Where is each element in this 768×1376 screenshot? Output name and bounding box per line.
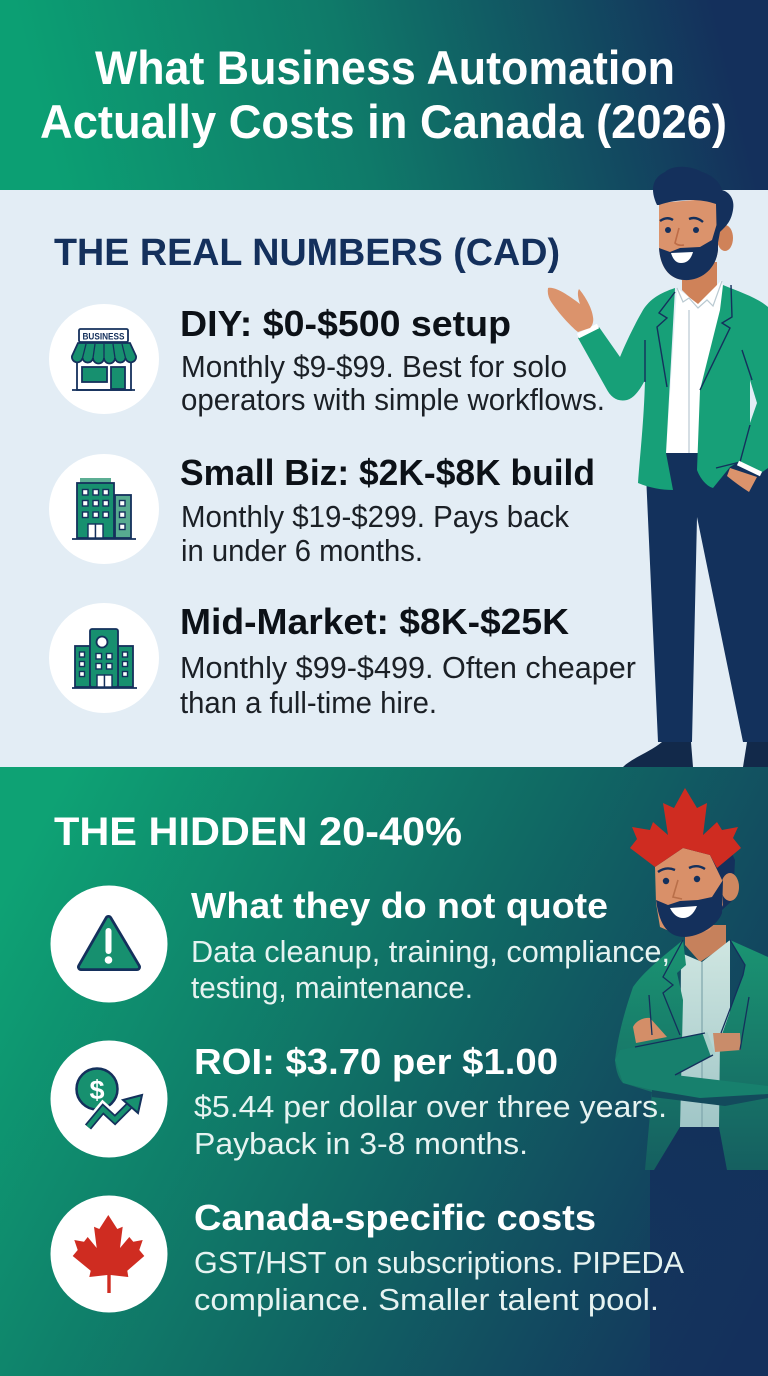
item: mid-market: Monthly $99-$499. Often cheaper <box>180 651 636 685</box>
item: Canada-specific costs <box>50 1196 684 1317</box>
item: what they do not quote <box>50 885 670 1005</box>
item: small business: Monthly $19-$299. Pays back <box>181 500 570 534</box>
item: DIY: DIY: $0-$500 setup <box>180 303 511 344</box>
item: mid-market <box>49 601 636 720</box>
icon: mid-size building <box>72 629 137 688</box>
item: what they do not quote: testing, maintenance. <box>191 970 473 1005</box>
icon: dollar coin with rising arrow <box>76 1068 142 1127</box>
title: Actually Costs in Canada (2026) <box>40 95 727 148</box>
icon: storefront: BUSINESS <box>82 332 124 342</box>
item: ROI: Payback in 3-8 months. <box>194 1126 528 1161</box>
item: small business: Small Biz: $2K-$8K build <box>180 452 595 493</box>
item: mid-market: than a full-time hire. <box>180 686 437 720</box>
item: small business <box>49 452 595 568</box>
icon: storefront <box>72 329 136 390</box>
item: small business: in under 6 months. <box>181 534 423 568</box>
title: What Business Automation <box>95 41 675 94</box>
heading: the real numbers: THE REAL NUMBERS (CAD) <box>54 232 560 274</box>
item: what they do not quote: What they do not quote <box>191 885 608 926</box>
illustration: presenter in green blazer <box>548 167 768 767</box>
item: what they do not quote: Data cleanup, training, compliance, <box>191 934 670 969</box>
item: ROI: $5.44 per dollar over three years. <box>194 1089 667 1124</box>
panel: the real numbers <box>0 190 768 767</box>
icon: maple leaf <box>73 1215 144 1293</box>
item: mid-market: Mid-Market: $8K-$25K <box>180 601 569 642</box>
icon: warning triangle <box>81 919 137 967</box>
item: Canada-specific costs: Canada-specific costs <box>194 1197 596 1238</box>
item: DIY <box>49 303 605 417</box>
heading: the hidden 20-40%: THE HIDDEN 20-40% <box>54 810 462 854</box>
icon: dollar coin with rising arrow: $ <box>89 1075 105 1105</box>
header band <box>0 0 768 190</box>
item: Canada-specific costs: compliance. Smaller talent pool. <box>194 1282 659 1317</box>
item: ROI <box>50 1040 667 1161</box>
item: Canada-specific costs: GST/HST on subscriptions. PIPEDA <box>194 1245 684 1280</box>
icon: office building <box>72 478 136 539</box>
illustration: man with maple-leaf crown <box>615 788 768 1376</box>
item: ROI: ROI: $3.70 per $1.00 <box>194 1041 558 1082</box>
item: DIY: operators with simple workflows. <box>181 383 605 417</box>
item: DIY: Monthly $9-$99. Best for solo <box>181 350 567 384</box>
title <box>40 41 727 148</box>
panel: the hidden costs <box>0 767 768 1376</box>
